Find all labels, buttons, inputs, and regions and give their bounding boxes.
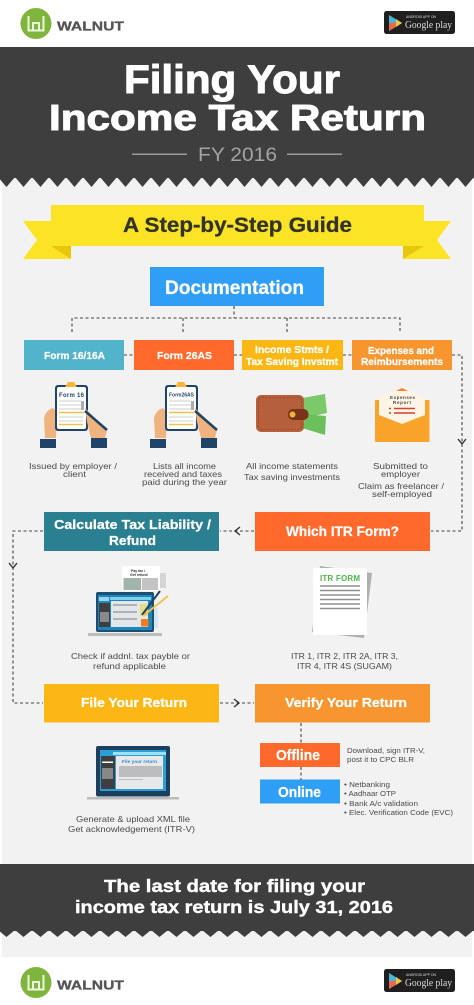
caption: Form 26AS: Lists all income [153,461,216,471]
footer text: last date: The last date for filing your [104,876,365,896]
caption: ITR forms [291,651,398,671]
box: Expenses and Reimbursements [352,340,452,370]
heading: Documentation [150,267,324,306]
text: online options [344,780,454,817]
connector: documentation to form boxes [72,306,400,355]
box: Form 26AS [134,340,234,370]
icon: laptop with tax sheet [88,566,168,636]
box: Form 16/16A: Form 16/16A [44,350,105,362]
box: Offline [260,743,340,767]
icon: Form 26AS clipboard: Form26AS [169,392,195,398]
top badge: Google Play: Google play [405,20,452,31]
icon: laptop with file your return [87,746,179,800]
ribbon banner: A Step-by-Step Guide [123,214,352,237]
caption: expenses: Claim as freelancer / [358,481,445,491]
caption: Form 16 [29,461,118,479]
footer text: last date [75,876,393,917]
icon: laptop with file your return: File your return [122,759,157,764]
box: Online [260,780,340,804]
box: Which ITR Form [255,512,430,551]
icon: expenses report envelope: Report [393,400,412,405]
icon: ITR form document [312,566,372,638]
text: online options: • Bank A/c validation [344,799,418,808]
caption: file return [68,814,195,834]
top badge: Google Play [384,11,455,34]
caption: ITR forms: ITR 1, ITR 2, ITR 2A, ITR 3, [291,651,398,661]
bottom logo: Walnut [20,967,124,998]
icon: expenses report envelope [375,388,430,442]
box: Verify Your Return: Verify Your Return [285,695,407,710]
text: offline steps: Download, sign ITR-V, [347,746,425,755]
title: Income Tax Return [49,97,426,138]
box: Income statements [242,340,343,370]
header band [0,47,474,187]
caption: file return: Get acknowledgement (ITR-V) [68,824,195,834]
top badge: Google Play: ANDROID APP ON [406,15,437,19]
icon: wallet with cash [256,394,327,435]
connector: expenses to which ITR form [431,355,466,531]
caption: Form 26AS [142,461,227,487]
footer text: last date: income tax return is July 31, 2016 [75,897,393,917]
connector: calculate to file [9,531,43,703]
caption: Form 26AS: paid during the year [142,477,227,487]
box: Expenses and Reimbursements: Expenses and [368,346,434,357]
top logo: Walnut: WALNUT [57,18,124,34]
box: Expenses and Reimbursements: Reimbursements [361,357,443,368]
caption: Form 16: client [63,469,87,479]
box: Income statements: Tax Saving Invstmt [246,357,339,368]
subtitle: FY 2016: FY 2016 [198,145,277,166]
title [49,58,426,138]
caption: ITR forms: ITR 4, ITR 4S (SUGAM) [297,661,392,671]
caption: income statements [244,461,340,482]
heading: Documentation: Documentation [165,278,304,299]
connector: file to verify [220,699,254,707]
box: Form 26AS: Form 26AS [157,350,212,362]
box: Online: Online [278,785,321,801]
box: Offline: Offline [276,748,320,764]
text: online options: • Netbanking [344,780,390,789]
caption: income statements: All income statements [246,461,338,471]
ribbon banner [23,205,451,259]
box: Calculate Tax Liability: Refund [109,534,156,548]
caption: calculate: refund applicable [93,661,166,671]
box: Form 16/16A [24,340,124,370]
text: online options: • Elec. Verification Code (EVC) [344,808,454,817]
caption: expenses: self-employed [372,489,432,499]
icon: laptop with tax sheet: Pay tax / [131,569,145,573]
connector: verify to offline and online [300,723,302,780]
text: offline steps [347,746,425,764]
caption: Form 16: Issued by employer / [29,461,118,471]
box: Income statements: Income Stmts / [255,345,329,356]
text: online options: • Aadhaar OTP [344,789,396,798]
icon: Form 26AS clipboard [150,382,217,448]
caption: expenses: Submitted to [373,461,428,471]
caption: Form 26AS: received and taxes [144,469,222,479]
box: File Your Return [44,684,219,722]
bottom logo: Walnut: WALNUT [57,978,124,992]
caption: expenses: employer [381,469,420,479]
bottom badge: Google Play: ANDROID APP ON [406,973,437,977]
bottom badge: Google Play: Google play [405,978,452,989]
top logo: Walnut [20,8,124,39]
icon: laptop with tax sheet: Get refund [130,573,148,577]
box: Calculate Tax Liability [44,512,219,551]
box: File Your Return: File Your Return [81,695,187,710]
icon: ITR form document: ITR FORM [320,574,360,583]
text: offline steps: post it to CPC BLR [347,755,415,764]
box: Which ITR Form: Which ITR Form? [286,524,399,539]
icon: Form 16 clipboard [40,382,107,448]
icon: expenses report envelope: Expenses [390,395,415,400]
bottom badge: Google Play [384,969,455,992]
box: Calculate Tax Liability: Calculate Tax Liability / [54,518,212,532]
footer band [0,864,474,937]
caption: calculate [71,651,190,671]
caption: file return: Generate & upload XML file [76,814,190,824]
box: Verify Your Return [255,684,430,722]
caption: expenses [358,461,445,499]
icon: Form 16 clipboard: Form 16 [59,393,85,399]
title: Filing Your [124,58,340,102]
caption: calculate: Check if addnl. tax payble or [71,651,190,661]
connector: which ITR form to calculate [220,527,254,535]
caption: income statements: Tax saving investments [244,472,340,482]
